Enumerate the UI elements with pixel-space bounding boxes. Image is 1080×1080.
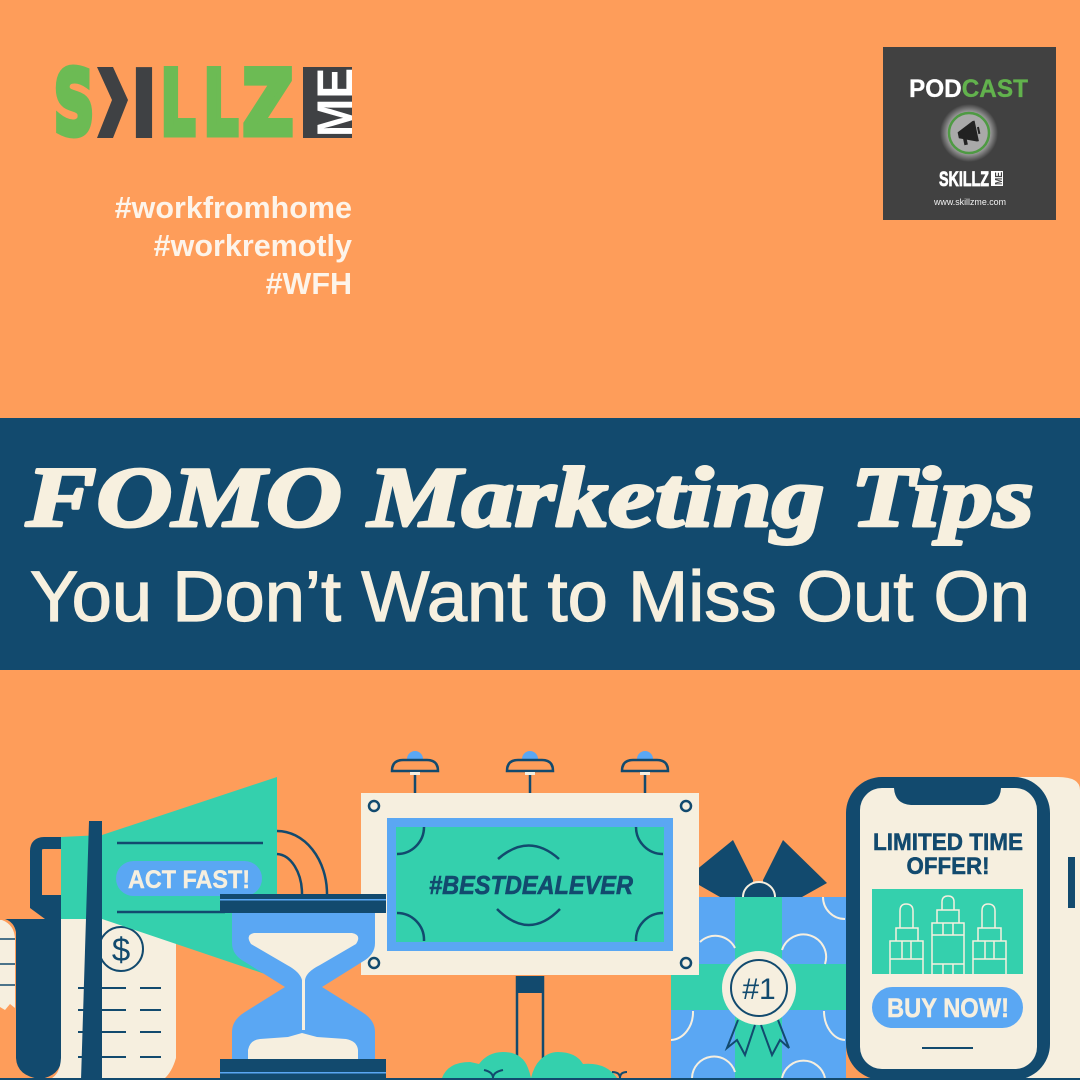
logo: SkillzMe <box>54 48 363 161</box>
billboard <box>361 751 699 1060</box>
smartphone: BUY NOW! <box>887 993 1009 1023</box>
product bottles <box>890 896 1006 974</box>
hourglass caps <box>220 894 386 1080</box>
rank badge <box>722 951 796 1055</box>
podcast badge <box>883 47 1056 220</box>
logo: SkillzMe: ME <box>307 68 363 137</box>
rank badge: #1 <box>742 973 776 1006</box>
hourglass <box>220 894 386 1080</box>
bow <box>690 840 827 897</box>
headline: FOMO Marketing Tips <box>25 449 1034 545</box>
hashtags: #workremotly <box>154 229 352 263</box>
dark blue receipt shadow <box>5 919 62 1079</box>
ground line <box>0 1078 1080 1080</box>
left receipt <box>0 920 15 1010</box>
centre receipt with dollar sign: $ <box>112 931 130 968</box>
smartphone: OFFER! <box>906 853 990 880</box>
billboard: #BESTDEALEVER <box>429 870 633 900</box>
billboard lamps <box>392 751 668 793</box>
bushes <box>442 1052 627 1078</box>
podcast badge: www.skillzme.com <box>933 197 1006 207</box>
podcast badge: SKILLZ <box>939 168 989 191</box>
hashtags <box>115 191 352 301</box>
smartphone <box>846 777 1080 1080</box>
hashtags: #WFH <box>266 267 352 301</box>
megaphone: ACT FAST! <box>128 866 250 894</box>
megaphone <box>30 777 327 1080</box>
smartphone: LIMITED TIME <box>873 829 1023 856</box>
podcast badge: ME <box>994 172 1005 185</box>
logo: SkillzMe: I <box>128 48 160 161</box>
podcast badge: PODCAST <box>909 75 1028 103</box>
billboard post <box>517 976 543 1060</box>
gift box <box>671 840 846 1080</box>
logo: SkillzMe: L <box>204 52 238 155</box>
logo: SkillzMe: Z <box>243 52 293 155</box>
logo: SkillzMe: L <box>161 52 195 155</box>
centre receipt with dollar sign <box>50 919 176 1079</box>
title banner <box>0 418 1080 670</box>
logo: SkillzMe: S <box>54 52 94 155</box>
subheadline: You Don’t Want to Miss Out On <box>30 558 1030 637</box>
hashtags: #workfromhome <box>115 191 352 225</box>
